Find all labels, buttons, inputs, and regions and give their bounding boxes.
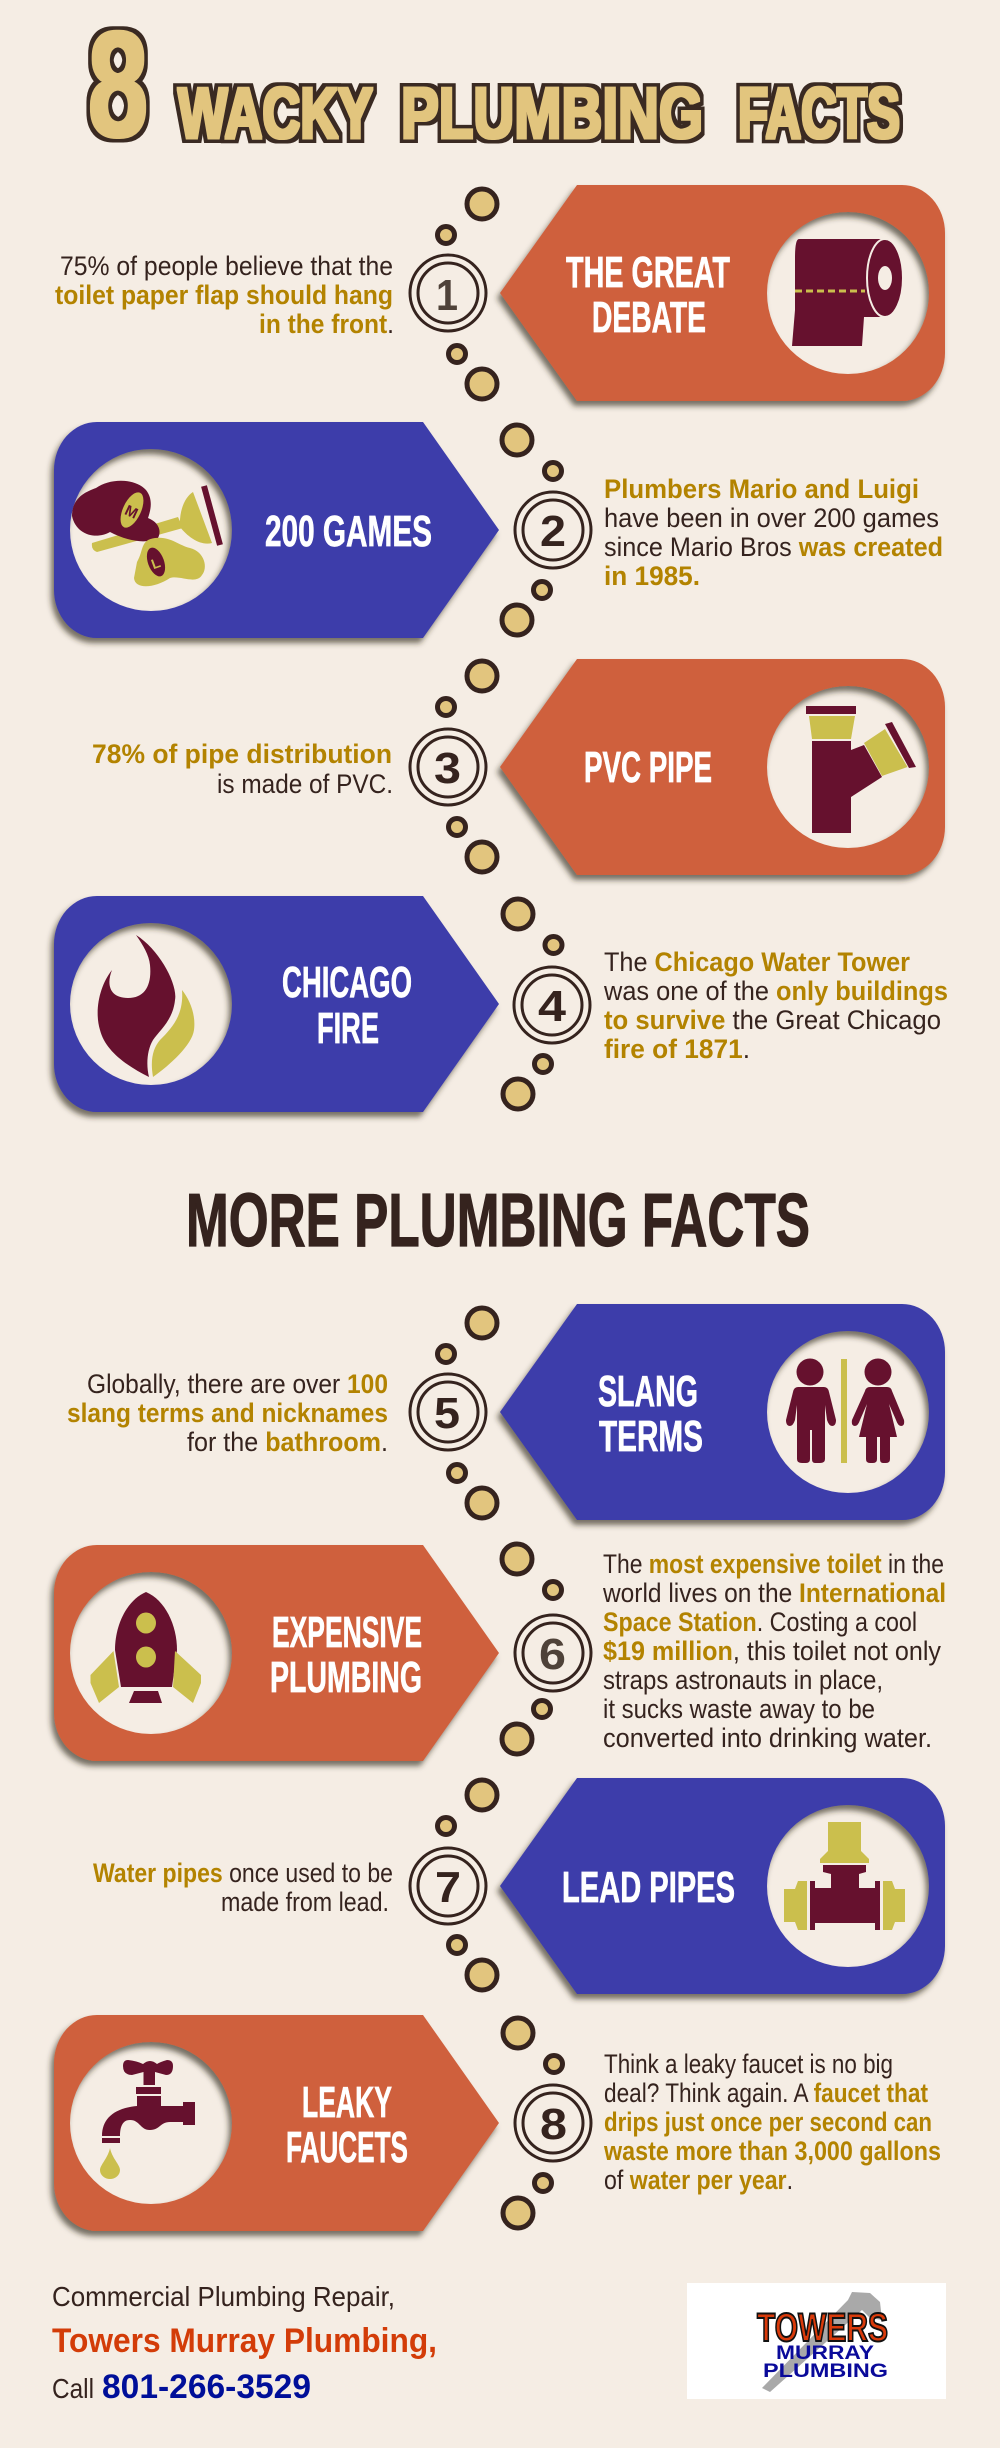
fact 5: slang terms xyxy=(67,1304,945,1520)
icon: pvc pipe xyxy=(806,706,916,833)
number badge 8: 8 xyxy=(540,2100,567,2149)
banner xyxy=(54,2015,499,2231)
banner title xyxy=(286,2078,408,2172)
banner xyxy=(500,185,945,401)
fact text: $19 million, this toilet not only xyxy=(603,1636,941,1666)
fact 3: pvc pipe xyxy=(92,659,945,875)
icon: toilet paper xyxy=(792,239,903,346)
fact text xyxy=(602,1549,946,1753)
banner title: PVC PIPE xyxy=(584,743,712,792)
fact 1: the great debate xyxy=(55,185,945,401)
banner title: EXPENSIVE xyxy=(272,1608,422,1657)
banner title: PLUMBING xyxy=(270,1653,422,1702)
bubbles xyxy=(438,1780,497,1990)
number badge 6 xyxy=(515,1615,591,1691)
title: WACKY xyxy=(178,74,373,154)
bubbles xyxy=(438,1308,497,1518)
title xyxy=(88,0,900,168)
number badge 7 xyxy=(410,1848,486,1924)
fact text xyxy=(603,947,948,1064)
number badge 2: 2 xyxy=(540,507,566,556)
fact text: Water pipes once used to be xyxy=(93,1858,393,1888)
bubbles xyxy=(502,425,562,635)
number badge 1: 1 xyxy=(436,271,458,320)
icon: flame xyxy=(98,935,194,1077)
fact text: in 1985. xyxy=(604,561,700,591)
title: PLUMBING xyxy=(401,74,703,154)
bubbles xyxy=(503,899,562,1109)
number badge 4: 4 xyxy=(538,982,567,1031)
icon: dripping faucet xyxy=(100,2060,195,2179)
fact 4: chicago fire xyxy=(54,896,948,1112)
fact text: Think a leaky faucet is no big xyxy=(604,2049,893,2079)
number badge 3: 3 xyxy=(434,744,461,793)
fact text xyxy=(92,739,393,799)
number badge 6: 6 xyxy=(539,1630,566,1679)
footer contact text: 801-266-3529 xyxy=(102,2368,311,2406)
icon: plumber hats and plunger: M xyxy=(122,502,140,523)
logo: towers murray plumbing: PLUMBING xyxy=(763,2361,888,2382)
fact text: 75% of people believe that the xyxy=(60,251,393,281)
fact text: straps astronauts in place, xyxy=(603,1665,883,1695)
fact 2: 200 games xyxy=(54,422,943,638)
fact text: for the bathroom. xyxy=(187,1427,388,1457)
title: FACTS xyxy=(738,74,900,154)
fact text: of water per year. xyxy=(604,2165,793,2195)
number badge 7: 7 xyxy=(435,1863,461,1912)
banner title: 200 GAMES xyxy=(265,507,432,556)
fact text xyxy=(604,474,943,591)
banner xyxy=(500,659,945,875)
banner title xyxy=(270,1608,422,1702)
fact text: Plumbers Mario and Luigi xyxy=(604,474,919,504)
icon: plumber hats and plunger: L xyxy=(149,554,163,572)
number badge 5 xyxy=(410,1374,486,1450)
banner title: DEBATE xyxy=(592,293,706,342)
fact text xyxy=(55,251,394,339)
number badge 4 xyxy=(514,967,590,1043)
banner xyxy=(500,1778,945,1994)
number badge 2 xyxy=(515,492,591,568)
fact 7: lead pipes xyxy=(93,1778,945,1994)
bubbles xyxy=(502,1544,562,1754)
number badge 5: 5 xyxy=(434,1389,460,1438)
fact text xyxy=(93,1858,393,1917)
banner title xyxy=(282,958,412,1053)
fact text: drips just once per second can xyxy=(604,2107,932,2137)
bubbles xyxy=(438,661,497,872)
fact text: have been in over 200 games xyxy=(604,503,939,533)
fact text: since Mario Bros was created xyxy=(604,532,943,562)
logo: towers murray plumbing: MURRAY xyxy=(776,2343,874,2364)
banner xyxy=(54,422,499,638)
banner title: CHICAGO xyxy=(282,958,412,1007)
fact text: is made of PVC. xyxy=(217,769,393,799)
fact text: slang terms and nicknames xyxy=(67,1398,388,1428)
banner xyxy=(54,896,499,1112)
icon: plumber hats and plunger xyxy=(72,481,220,586)
fact text: to survive the Great Chicago xyxy=(604,1005,941,1035)
bubbles xyxy=(503,2018,562,2228)
footer contact text: Towers Murray Plumbing, xyxy=(52,2322,437,2360)
banner title xyxy=(566,248,730,342)
bubbles xyxy=(438,189,497,399)
banner title: FIRE xyxy=(317,1004,379,1053)
logo: towers murray plumbing: TOWERS xyxy=(757,2306,888,2350)
fact text: world lives on the International xyxy=(602,1578,946,1608)
icon: rocket xyxy=(90,1592,201,1703)
title: 8 xyxy=(88,0,148,168)
logo: towers murray plumbing xyxy=(687,2283,946,2399)
fact text: waste more than 3,000 gallons xyxy=(603,2136,941,2166)
icon: lead pipe fitting xyxy=(784,1822,905,1930)
banner xyxy=(500,1304,945,1520)
fact text: it sucks waste away to be xyxy=(603,1694,875,1724)
banner title: THE GREAT xyxy=(566,248,730,297)
banner title xyxy=(598,1367,703,1461)
fact text: Space Station. Costing a cool xyxy=(603,1607,917,1637)
number badge 1 xyxy=(410,255,486,331)
fact text: The Chicago Water Tower xyxy=(604,947,910,977)
fact text: 78% of pipe distribution xyxy=(92,739,392,769)
fact text: toilet paper flap should hang xyxy=(55,280,393,310)
fact text: made from lead. xyxy=(221,1887,389,1917)
fact text: in the front. xyxy=(259,309,394,339)
banner title: LEAKY xyxy=(302,2078,392,2127)
fact text xyxy=(603,2049,941,2195)
icon: restroom figures xyxy=(786,1358,904,1463)
fact text: Globally, there are over 100 xyxy=(87,1369,388,1399)
banner xyxy=(54,1545,499,1761)
footer contact text: Commercial Plumbing Repair, xyxy=(52,2281,395,2312)
banner title: FAUCETS xyxy=(286,2123,408,2172)
footer contact text: Call xyxy=(52,2373,94,2404)
fact 8: leaky faucets xyxy=(54,2015,941,2231)
number badge 8 xyxy=(515,2085,591,2161)
fact text xyxy=(67,1369,388,1457)
fact 6: expensive plumbing xyxy=(54,1544,946,1761)
fact text: was one of the only buildings xyxy=(603,976,948,1006)
banner title: LEAD PIPES xyxy=(562,1863,735,1912)
fact text: deal? Think again. A faucet that xyxy=(604,2078,928,2108)
fact text: converted into drinking water. xyxy=(603,1723,932,1753)
footer contact text xyxy=(52,2281,437,2406)
banner title: TERMS xyxy=(599,1412,703,1461)
fact text: The most expensive toilet in the xyxy=(603,1549,944,1579)
banner title: SLANG xyxy=(598,1367,698,1416)
fact text: fire of 1871. xyxy=(604,1034,750,1064)
number badge 3 xyxy=(410,729,486,805)
